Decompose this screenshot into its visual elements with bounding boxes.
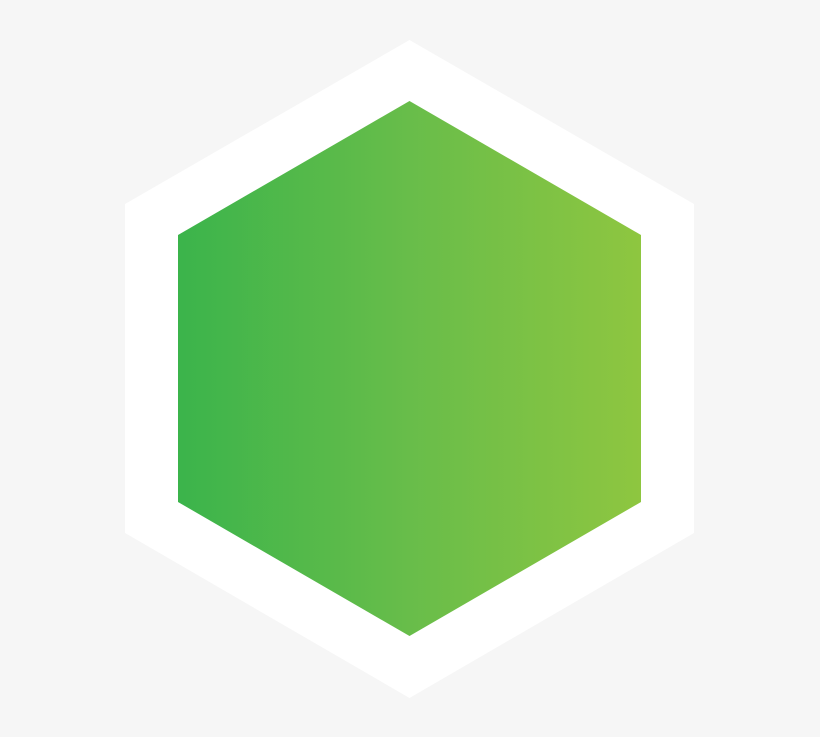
inner green gradient hexagon [178,101,641,636]
outer white hexagon [125,40,694,698]
